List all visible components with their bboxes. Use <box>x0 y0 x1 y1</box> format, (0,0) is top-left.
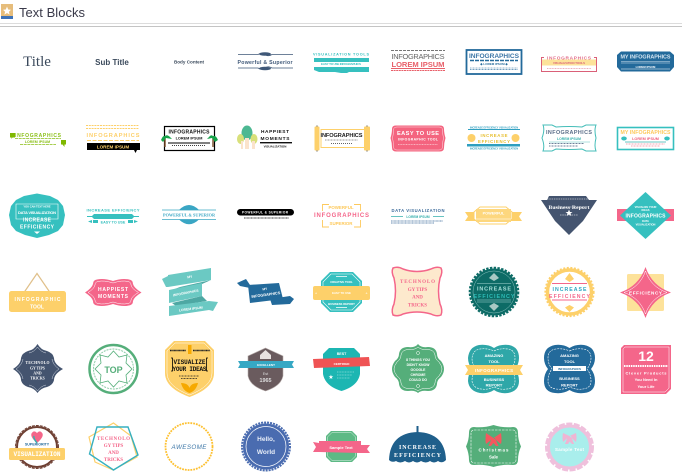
text: Title: Title <box>23 54 51 70</box>
block: pink and yellow Infographics: VISUALIZATION TOOLS <box>553 61 585 65</box>
header: Text Blocks <box>0 4 682 27</box>
badge: Visualization brown seal <box>9 426 65 468</box>
block: Increase Efficiency with flowers: INCREASE EFFICIENCY VISUALIZATION <box>470 126 518 130</box>
text: Body Content: Body Content <box>174 60 205 64</box>
block: teal banner: VISUALIZATION TOOLS <box>313 52 369 56</box>
block: teal banner <box>313 52 369 73</box>
badge: Visualization brown seal: VISUALIZATION <box>14 451 61 458</box>
block: blue framed Infographics: INFOGRAPHICS <box>469 53 520 60</box>
seal: Increase Efficiency yellow ring: EFFICIENCY <box>549 294 591 300</box>
block: green speech Infographics: LOREM IPSUM <box>25 140 50 144</box>
badge: Certified teal shield with red band: CERTIFIED <box>334 362 350 366</box>
seal: Increase Efficiency dark teal: EFFICIENCY <box>474 294 515 300</box>
badge: Technology tips slate: AND <box>33 372 42 376</box>
badge: Technology tips pentagon: TECHNOLO <box>97 437 130 442</box>
card: 12 Clever Products: Clever Products <box>626 370 667 376</box>
badge: Infographics diamond on pink band: DATA <box>642 219 649 223</box>
ribbon: My Infographics teal folded: MY <box>187 275 193 279</box>
block: bracketed Infographics: POWERFUL <box>328 205 354 210</box>
block: blue framed Infographics <box>466 50 522 74</box>
badge: Top green ring <box>90 345 138 393</box>
badge: Amazing tool teal quatrefoil: BUSINESS <box>484 377 505 382</box>
badge: Technology tips pentagon: GY TIPS <box>104 444 124 449</box>
badge: Since 1965 brown shield with teal band: 1965 <box>260 378 272 384</box>
block: My Infographics banner: LOREM IPSUM <box>636 65 656 69</box>
badge: Infographics diamond on pink band <box>617 192 674 239</box>
ribbon: My Infographics teal folded: LOREM IPSUM <box>179 306 203 312</box>
ribbon: My Infographics blue: MY <box>262 287 268 291</box>
badge: Sample Text green octagon with pink ribbon: Sample Text <box>329 445 353 450</box>
badge: Technology tips slate <box>13 344 63 393</box>
block: teal outlined Infographics <box>542 125 596 151</box>
badge: Technology tips slate: TRICKS <box>30 376 45 380</box>
badge: Certified teal shield with red band: ★ <box>328 374 334 381</box>
block: teal banner: EASY TO USE INFOGRAPHICS <box>321 62 361 66</box>
ribbon: My Infographics teal folded <box>162 268 218 316</box>
badge: Christmas Sale green frame: Christmas <box>478 448 509 452</box>
badge: Visualize your ideas yellow shield <box>165 341 214 397</box>
badge: things you didn't know green <box>392 344 444 393</box>
block: palm tree Infographics: LOREM IPSUM <box>176 136 202 140</box>
block: My Infographics teal frame: LOREM IPSUM <box>632 137 659 141</box>
card: 12 Clever Products <box>621 345 671 394</box>
badge: Visualize your ideas yellow shield: VISUALIZE <box>174 359 206 366</box>
badge: Certified teal shield with red band: BEST <box>337 352 347 356</box>
card: 12 Clever Products: 12 <box>638 348 654 364</box>
seal: Increase Efficiency dark teal <box>470 268 518 316</box>
badge: Amazing tool teal quatrefoil: TOOL <box>488 359 500 364</box>
block: My Infographics banner: MY INFOGRAPHICS <box>620 54 671 60</box>
ribbon: My Infographics blue: INFOGRAPHICS <box>251 291 281 299</box>
block: Infographics Lorem Ipsum: LOREM IPSUM <box>392 60 444 69</box>
card: 12 Clever Products: You Need In <box>635 377 658 382</box>
badge: Since 1965 brown shield with teal band: EXCELLENT <box>257 363 275 367</box>
block: Infographics Lorem Ipsum: INFOGRAPHICS <box>392 52 445 61</box>
seal: Increase Efficiency yellow ring <box>545 268 594 316</box>
text: Sub Title: Sub Title <box>95 58 129 67</box>
badge: things you didn't know green: CHROME <box>410 373 426 377</box>
block: My Infographics teal frame <box>618 128 674 150</box>
badge: Awesome dotted circle <box>166 423 212 470</box>
badge: Christmas Sale green frame <box>466 425 521 467</box>
badge: Since 1965 brown shield with teal band: Est <box>263 372 269 376</box>
block: Happiest Moments with trees: MOMENTS <box>260 136 290 142</box>
badge: Certified teal shield with red band <box>313 348 370 391</box>
badge: Christmas Sale green frame: Sale <box>489 454 499 460</box>
badge: Top green ring: TOP <box>104 365 123 375</box>
badge: Efficiency pink star on yellow <box>620 267 671 318</box>
badge: teal octagon with yellow band <box>313 272 370 312</box>
block: Increase Efficiency with flowers: INCREASE <box>480 133 508 138</box>
badge: Increase Efficiency teal: DATA VISUALIZATION <box>18 210 56 215</box>
block: Happiest Moments with trees: VISUALIZATION <box>264 144 286 148</box>
block: Increase Efficiency, easy to use: INCREASE EFFICIENCY <box>86 208 140 212</box>
badge: Awesome dotted circle: AWESOME <box>170 444 207 451</box>
sign: Infographic Tool: INFOGRAPHIC <box>14 297 61 303</box>
block: green speech Infographics <box>10 133 66 147</box>
block: teal outlined Infographics: LOREM IPSUM <box>557 137 581 141</box>
badge: things you didn't know green: 8 THINGS YOU <box>406 358 430 362</box>
badge: Technology tips slate: TECHNOLO <box>26 361 50 365</box>
umbrella: Increase Efficiency: INCREASE <box>399 445 436 451</box>
block: Powerful and Superior blue ornament: POWERFUL & SUPERIOR <box>163 212 216 218</box>
block: bracketed Infographics: INFOGRAPHICS <box>314 213 369 219</box>
sign: Infographic Tool <box>9 274 66 312</box>
badge: things you didn't know green: COULD DO <box>409 378 427 382</box>
block: Infographics Lorem Ipsum <box>391 50 445 70</box>
badge: Amazing tool blue quatrefoil: BUSINESS <box>559 376 580 381</box>
badge: Technology tips cream frame: TRICKS <box>408 304 427 308</box>
ribbon: My Infographics teal folded: INFOGRAPHICS <box>173 288 200 297</box>
badge: Happiest Moments pink: HAPPIEST <box>98 287 128 293</box>
badge: teal octagon with yellow band: EASY TO USE <box>332 291 351 295</box>
umbrella: Increase Efficiency <box>389 426 446 462</box>
badge: Technology tips cream frame: AND <box>412 296 423 300</box>
badge: things you didn't know green: DIDN'T KNOW <box>407 363 430 367</box>
badge: Amazing tool blue quatrefoil: TOOL <box>564 359 576 364</box>
ribbon: My Infographics blue <box>237 279 294 305</box>
badge: Since 1965 brown shield with teal band <box>238 348 294 391</box>
block: Increase Efficiency, easy to use <box>86 208 140 224</box>
badge: Infographics diamond on pink band: INFOGRAPHICS <box>626 214 666 220</box>
block: Powerful and Superior <box>238 52 293 70</box>
badge: teal octagon with yellow band: + <box>365 290 368 296</box>
block: black pill Powerful <box>237 209 294 218</box>
badge: Visualization brown seal: SUPERIORITY <box>25 442 50 446</box>
badge: Technology tips slate: GY TIPS <box>30 366 45 370</box>
block: Increase Efficiency with flowers <box>467 126 520 150</box>
badge: Amazing tool teal quatrefoil <box>465 345 523 393</box>
block: Data visualization: LOREM IPSUM <box>406 215 430 219</box>
block: Data visualization <box>391 208 444 223</box>
block: bracketed Infographics <box>314 204 369 227</box>
badge: things you didn't know green: GOOGLE <box>411 368 426 372</box>
block: green speech Infographics: INFOGRAPHICS <box>15 133 62 139</box>
badge: Business Report inverted triangle <box>541 196 597 235</box>
sign: Infographic Tool: TOOL <box>30 304 44 310</box>
badge: teal octagon with yellow band: CREATIVE TOOL <box>330 280 353 284</box>
block: teal outlined Infographics: INFOGRAPHICS <box>546 130 592 136</box>
badge: Happiest Moments pink <box>85 279 142 306</box>
badge: Increase Efficiency teal: EFFICIENCY <box>20 224 55 230</box>
block: Happiest Moments with trees <box>237 126 292 149</box>
block: Increase Efficiency with flowers: EFFICIENCY <box>478 139 510 144</box>
seal: Hello World blue: World <box>257 449 275 456</box>
block: Easy to use: EASY TO USE <box>397 131 439 137</box>
badge: Infographics diamond on pink band: VISUALIZE YOUR <box>635 205 656 209</box>
block: yellow and black Infographics <box>86 126 140 153</box>
block: Powerful and Superior blue ornament <box>162 205 216 224</box>
badge: Technology tips pentagon <box>89 423 138 470</box>
badge: Happiest Moments pink: MOMENTS <box>98 294 129 300</box>
card: 12 Clever Products: Your Life <box>637 384 655 389</box>
badge: Business Report inverted triangle: Business Report <box>548 205 590 211</box>
badge: Technology tips cream frame <box>392 267 442 316</box>
block: Powerful and Superior: Powerful & Superior <box>238 60 292 66</box>
badge: Technology tips pentagon: TRICKS <box>104 458 123 463</box>
seal: Hello World blue <box>242 422 290 470</box>
badge: Technology tips pentagon: AND <box>108 451 119 456</box>
seal: Increase Efficiency dark teal: INCREASE <box>477 286 511 292</box>
block: Easy to use: INFOGRAPHIC TOOL <box>398 138 438 142</box>
badge: Amazing tool blue quatrefoil: INFOGRAPHICS <box>558 367 581 371</box>
block: pink and yellow Infographics <box>542 54 596 72</box>
seal: Increase Efficiency yellow ring: INCREASE <box>552 287 587 293</box>
block: yellow and black Infographics: LOREM IPSUM <box>97 144 129 150</box>
block: Increase Efficiency with flowers: INCREASE EFFICIENCY VISUALIZATION <box>470 148 518 150</box>
badge: Infographics diamond on pink band: VISUALIZATION <box>636 222 655 226</box>
badge: Amazing tool blue quatrefoil <box>544 345 595 393</box>
badge: Technology tips cream frame: GY TIPS <box>408 288 428 293</box>
block: My Infographics banner <box>617 52 674 72</box>
seal: Hello World blue: Hello, <box>257 436 275 443</box>
block: pink and yellow Infographics: INFOGRAPHICS <box>547 56 592 62</box>
badge: teal octagon with yellow band: + <box>315 290 318 296</box>
block: yellow ribbon Powerful: POWERFUL <box>483 212 505 216</box>
block: scroll Infographics: INFOGRAPHICS <box>320 133 363 139</box>
block: bracketed Infographics: SUPERIOR <box>330 221 353 226</box>
badge: Sample Text green octagon with pink ribbon <box>313 431 370 462</box>
block: Happiest Moments with trees: HAPPIEST <box>261 129 289 135</box>
badge: Increase Efficiency teal: YOU CAN TEXT HERE <box>23 204 51 208</box>
badge: Visualize your ideas yellow shield: YOUR IDEAS <box>172 366 207 373</box>
block: palm tree Infographics <box>161 126 218 150</box>
block: yellow and black Infographics: INFOGRAPHICS <box>86 133 140 139</box>
block: yellow ribbon Powerful <box>465 207 522 224</box>
header: Text Blocks: Text Blocks <box>19 5 86 20</box>
block: My Infographics teal frame: MY INFOGRAPHICS <box>620 130 671 136</box>
badge: Amazing tool teal quatrefoil: INFOGRAPHICS <box>475 368 513 373</box>
badge: Amazing tool teal quatrefoil: REPORT <box>486 382 503 388</box>
badge: Amazing tool blue quatrefoil: REPORT <box>561 382 578 388</box>
badge: Increase Efficiency teal: INCREASE <box>23 218 52 224</box>
block: scroll Infographics <box>314 126 370 152</box>
block: Easy to use <box>390 126 446 152</box>
badge: Amazing tool blue quatrefoil: AMAZING <box>560 353 579 358</box>
badge: Sample Text aqua scalloped <box>546 424 592 470</box>
block: Increase Efficiency, easy to use: EASY TO USE <box>101 220 126 224</box>
badge: Technology tips cream frame: TECHNOLO <box>400 280 435 285</box>
badge: Sample Text aqua scalloped: Sample Text <box>555 447 585 452</box>
block: black pill Powerful: POWERFUL & SUPERIOR <box>242 210 289 214</box>
badge: Amazing tool teal quatrefoil: AMAZING <box>485 353 503 358</box>
block: blue framed Infographics: ◆ LOREM IPSUM ◆ <box>479 62 508 66</box>
badge: teal octagon with yellow band: BUSINESS REPORT <box>328 302 355 306</box>
badge: Increase Efficiency teal <box>9 194 65 238</box>
umbrella: Increase Efficiency: EFFICIENCY <box>394 453 442 459</box>
block: Data visualization: DATA VISUALIZATION <box>392 208 444 213</box>
block: palm tree Infographics: INFOGRAPHICS <box>168 130 210 136</box>
badge: Efficiency pink star on yellow: EFFICIENCY <box>629 290 662 296</box>
badge: Infographics diamond on pink band: IDEAS <box>642 208 650 212</box>
